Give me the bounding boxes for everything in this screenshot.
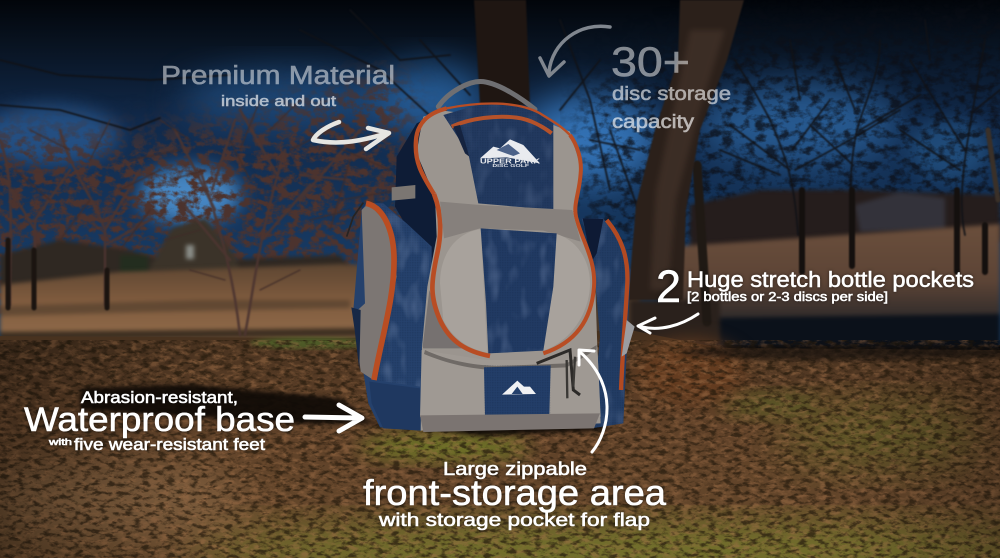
top navy panel with logo: UPPER PARK [480, 159, 540, 166]
heading: Huge stretch bottle pockets [687, 267, 974, 292]
capacity label: capacity [612, 112, 695, 133]
subheading: inside and out [221, 93, 337, 110]
arrow: to base [305, 405, 362, 431]
icon: top handle [438, 82, 535, 109]
heading: front-storage area [363, 472, 667, 513]
line three: with storage pocket for flap [378, 509, 650, 530]
background: far field [0, 224, 1000, 350]
side pocket: left [347, 203, 433, 431]
arrow: to storage [540, 26, 610, 76]
line three: five wear-resistant feet [74, 436, 265, 454]
background: tree canopy texture [0, 44, 1000, 314]
arrow: to material [313, 122, 389, 149]
background: bare trees [0, 10, 1000, 335]
with: with [48, 437, 72, 447]
callout: premium material [161, 62, 395, 110]
shaded lower sides [423, 290, 463, 348]
note: [2 bottles or 2-3 discs per side] [687, 290, 888, 304]
background: distant tree line and houses [0, 190, 1000, 290]
main body [417, 111, 601, 431]
line one: Abrasion-resistant, [81, 388, 238, 407]
arrow: to front storage [579, 350, 607, 452]
number: 30+ [611, 38, 690, 85]
callout: front storage [363, 458, 667, 530]
callout: bottle pockets [656, 261, 974, 312]
number: 2 [656, 261, 681, 312]
top navy panel with logo [443, 103, 555, 212]
orange zipper piping [416, 104, 594, 356]
background: sky [0, 0, 1000, 345]
cross strap [440, 202, 581, 242]
belly pocket [440, 228, 590, 354]
top navy panel with logo: DISC GOLF [492, 163, 530, 168]
heading: Premium Material [161, 62, 395, 90]
cast shadow [80, 384, 610, 436]
line one: Large zippable [443, 458, 587, 479]
backpack [347, 82, 635, 432]
bottom pocket [420, 345, 601, 432]
callout: waterproof base [24, 388, 295, 454]
side pocket: right [582, 218, 635, 428]
disc storage label: disc storage [612, 84, 731, 105]
callout: disc storage [611, 38, 731, 133]
back panel [395, 108, 450, 270]
arrow: to bottle pocket [638, 314, 698, 333]
heading: Waterproof base [24, 401, 295, 439]
background: ground with leaves [0, 330, 1000, 558]
side handle [392, 185, 415, 201]
background: tree trunks [474, 0, 744, 300]
